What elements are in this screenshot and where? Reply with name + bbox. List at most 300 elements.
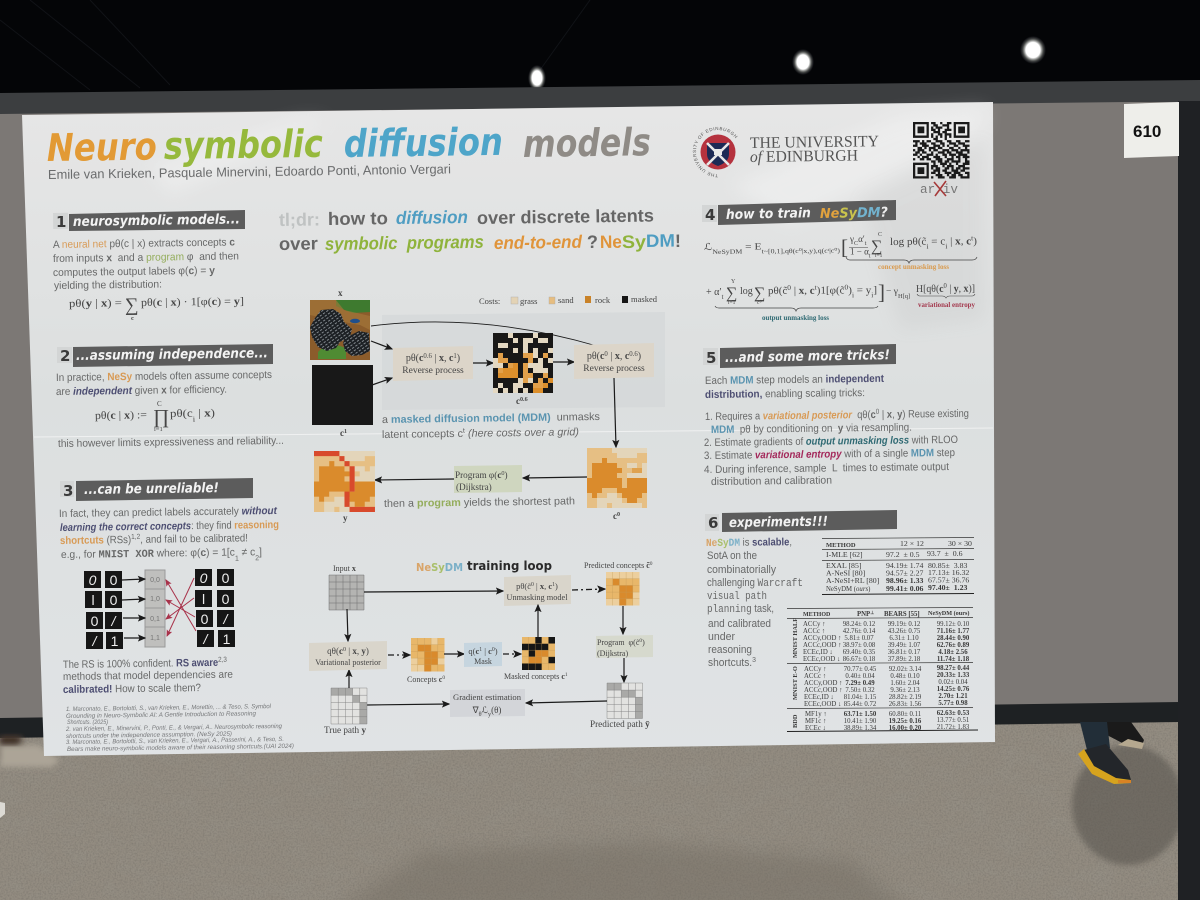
panel: poster sheet <box>22 102 995 756</box>
table: MNIST and BDD results: 42.76± 0.14 <box>843 628 876 635</box>
heading: tl;dr statement <box>279 206 681 254</box>
chart: NeSyDM training loop <box>309 559 653 735</box>
box: mask <box>464 642 502 667</box>
formula: NeSyDM loss first line: [ <box>841 235 848 259</box>
table: MNIST and BDD results: 0.40± 0.04 <box>845 673 875 680</box>
formula: NeSyDM loss second line: ∑ <box>726 285 737 302</box>
label: concepts: Concepts c0 <box>407 675 445 684</box>
arrow: reverse to c0.6 <box>473 362 493 364</box>
text block: scaling tricks list: distribution and calibration <box>711 475 832 488</box>
box: program Dijkstra: Program φ(c0) <box>455 470 508 480</box>
chart: masked diffusion figure <box>310 288 665 523</box>
text block: section 3 body: e.g., for MNIST XOR where: φ(c) = 1[c1 ≠ c2] <box>61 546 262 564</box>
arrow: unmasking to predicted <box>572 589 605 590</box>
formula: independence factorisation: ∏ <box>153 406 169 428</box>
table: MNIST and BDD results: ACCy,OOD ↑ <box>804 680 842 687</box>
formula: independence factorisation: pθ(c i | x) <box>170 407 215 423</box>
table: MNIST and BDD results: 26.83± 1.56 <box>889 701 922 708</box>
text block: references: 1. Marconato, E., Bortolotti, S., van Krieken, E., Morettin, ... & Teso, S. Symbol <box>66 703 272 713</box>
table: MNIST and BDD results: 9.36± 2.13 <box>890 687 920 694</box>
formula: independence factorisation: C <box>157 400 162 408</box>
formula: NeSyDM loss first line: ℒNeSyDM = E t~[0,1],qθ(c⁰|x,y),q(cᵗ|c⁰) <box>704 241 840 255</box>
table: MNIST and BDD results: 37.89± 2.18 <box>888 656 921 663</box>
table: MNIST and BDD results: 63.71± 1.50 <box>844 711 877 718</box>
text block: experiments summary: challenging Warcraft <box>707 577 803 590</box>
table: MNIST and BDD results: 43.26± 0.75 <box>888 628 921 635</box>
panel: section 4 how to train <box>702 200 978 322</box>
heading: training loop: training loop <box>467 559 552 573</box>
text block: section 2 body: are independent given x for efficiency. <box>56 384 227 398</box>
heading: section 4: 4 <box>705 206 715 224</box>
text block: scaling tricks list: 3. Estimate variational entropy with of a single MDM step <box>704 447 955 462</box>
caption: masked diffusion model: a masked diffusion model (MDM) unmasks <box>382 411 600 426</box>
title: Neuro <box>47 124 157 170</box>
table: scaling results: METHOD <box>826 542 856 549</box>
label: true path: True path y <box>324 725 366 735</box>
box: program: Program φ(c̃0) <box>597 638 645 647</box>
text block: RS aware note: calibrated! How to scale them? <box>63 682 201 696</box>
formula: NeSyDM loss second line: log <box>740 286 753 297</box>
label: predicted path: Predicted path ȳ <box>590 719 650 729</box>
formula: independence factorisation: i=1 <box>154 426 163 433</box>
formula: NeSyDM loss second line: output unmasking loss <box>762 314 829 322</box>
table: MNIST and BDD results: 98.27± 0.44 <box>937 665 970 672</box>
table: scaling results: 97.40± 1.23 <box>928 583 967 592</box>
text block: section 5 intro <box>705 373 884 401</box>
box: second reverse process <box>574 343 654 379</box>
table: MNIST and BDD results: 62.63± 0.53 <box>937 710 970 717</box>
chart: MNIST XOR reasoning shortcut diagram: 0 <box>110 592 118 608</box>
heading: section 4: NeSyDM? <box>820 205 888 222</box>
label: x: x <box>338 288 343 298</box>
formula: output distribution: ∑ <box>125 295 139 316</box>
chart: MNIST XOR reasoning shortcut diagram <box>84 569 235 649</box>
text block: section 1 body: computes the output labels φ(c) = y <box>53 265 215 279</box>
title: diffusion <box>344 120 503 166</box>
legend: costs: masked <box>631 294 658 304</box>
icon: visitor legs and shoes right <box>1078 722 1144 784</box>
table: MNIST and BDD results: MNIST E-O <box>792 666 799 700</box>
chart: MNIST XOR reasoning shortcut diagram: 0,0 <box>150 577 160 584</box>
heading: section 2: 2 <box>60 347 70 365</box>
heading: section 6: 6 <box>708 514 718 532</box>
chart: MNIST XOR reasoning shortcut diagram: 0 <box>89 572 97 588</box>
table: MNIST and BDD results: MF1c ↑ <box>805 718 826 725</box>
text block: experiments summary: under <box>708 631 735 643</box>
table: MNIST and BDD results: 13.77± 0.51 <box>937 717 969 724</box>
formula: NeSyDM loss second line: ] <box>878 280 885 304</box>
table: MNIST and BDD results: BEARS [55] <box>884 611 920 618</box>
formula: NeSyDM loss first line: log pθ(c̃ i = ci | x, ct) <box>890 234 978 251</box>
background: right post <box>1178 101 1200 900</box>
box: program <box>596 635 653 658</box>
table: MNIST and BDD results: 16.00± 0.20 <box>889 725 922 732</box>
table: MNIST and BDD results: 85.44± 0.72 <box>844 701 877 708</box>
background: grey poster board <box>0 100 1180 719</box>
text block: scaling tricks list: 1. Requires a variational posterior qθ(c0 | x, y) Reuse existing <box>705 405 969 423</box>
text block: RS aware note <box>63 654 233 696</box>
formula: independence factorisation <box>95 400 215 433</box>
logo: University of Edinburgh <box>692 126 879 178</box>
heading: section 1: 1 <box>56 213 66 231</box>
table: MNIST and BDD results: 36.81± 0.17 <box>888 649 921 656</box>
arrow: x skip connection <box>371 322 597 346</box>
heading: section 2: ...assuming independence... <box>76 345 268 364</box>
chart: MNIST XOR reasoning shortcut diagram: 0 <box>201 611 209 627</box>
heading: section 5 <box>703 344 896 368</box>
table: scaling results: 67.57± 36.76 <box>928 576 969 584</box>
chart: MNIST XOR reasoning shortcut diagram: 1 <box>223 631 231 647</box>
table: scaling results <box>822 538 974 594</box>
heading: tl;dr statement: over discrete latents <box>477 206 654 228</box>
icon: arXiv logo: ar iv <box>920 182 958 197</box>
text block: section 1 body: A neural net pθ(c | x) extracts concepts c <box>53 236 235 251</box>
heading: tl;dr statement: tl;dr: <box>279 209 320 230</box>
heading: section 6: experiments!!! <box>729 514 828 531</box>
arrow: posterior to concepts <box>388 654 410 656</box>
box: first reverse process: pθ(c0.6 | x, c1) <box>406 352 460 364</box>
background: board bottom frame <box>0 702 1180 738</box>
text block: RS aware note: The RS is 100% confident. RS aware2,3 <box>63 654 227 671</box>
table: MNIST and BDD results: 38.89± 1.34 <box>844 725 877 732</box>
table: MNIST and BDD results: 62.76± 0.89 <box>937 642 970 649</box>
table: MNIST and BDD results: 98.24± 0.12 <box>843 621 876 628</box>
table: MNIST and BDD results: ECEc,ID ↓ <box>803 649 833 656</box>
background: dark hall ceiling <box>0 0 1200 110</box>
grid: predicted path <box>607 683 642 718</box>
box: first reverse process <box>393 346 473 381</box>
icon: visitor legs left <box>0 736 60 818</box>
booth number 610 <box>1124 102 1179 158</box>
table: scaling results: 94.19± 1.74 <box>886 561 924 570</box>
table: MNIST and BDD results: 60.80± 0.11 <box>889 711 921 718</box>
heading: section 3: ...can be unreliable! <box>84 480 219 498</box>
table: MNIST and BDD results: ACCc ↑ <box>804 673 826 680</box>
heading: tl;dr statement: over <box>279 233 318 254</box>
panel: section 1 neurosymbolic models <box>53 210 245 322</box>
title <box>47 120 651 170</box>
icon: ceiling lights <box>528 36 1046 91</box>
grid: true path <box>331 688 367 724</box>
formula: NeSyDM loss first line: γCα′t <box>849 234 867 247</box>
grid: input x <box>329 575 364 610</box>
chart: MNIST XOR reasoning shortcut diagram: 0 <box>222 570 230 586</box>
formula: output distribution: pθ(y | x) = <box>69 297 122 310</box>
text block: references: Shortcuts. (2025) <box>67 719 108 726</box>
label: predicted concepts: Predicted concepts c̃0 <box>584 561 653 570</box>
legend: costs: grass <box>520 296 537 306</box>
table: scaling results: 94.57± 2.27 <box>886 568 924 578</box>
text block: section 3 body: learning the correct concepts: they find reasoning <box>60 519 279 534</box>
chart: MNIST XOR reasoning shortcut diagram: 1,0 <box>150 596 160 603</box>
table: MNIST and BDD results: ECEc,ID ↓ <box>804 694 834 701</box>
text block: scaling tricks list: 4. During inference, sample L times to estimate output <box>704 461 949 476</box>
formula: output distribution <box>69 295 244 322</box>
arrow: x to reverse <box>371 341 392 349</box>
title: symbolic <box>164 122 324 168</box>
table: MNIST and BDD results: NeSyDM (ours) <box>928 610 969 617</box>
text block: RS aware note: methods that model dependencies are <box>63 669 233 683</box>
heading: tl;dr statement: DM <box>646 231 675 251</box>
background: carpet floor <box>0 715 1200 900</box>
table: MNIST and BDD results: PNP⊥ <box>857 610 875 618</box>
box: mask: Mask <box>474 657 492 666</box>
image: black mask c1 <box>312 365 373 425</box>
booth number 610: 610 <box>1133 122 1161 141</box>
text block: section 2 body: In practice, NeSy models often assume concepts <box>56 369 272 384</box>
text block: section 3 body: shortcuts (RSs)1,2, and fail to be calibrated! <box>60 530 248 547</box>
table: MNIST and BDD results: METHOD <box>803 612 831 618</box>
table: scaling results: A-NeSI+RL [80] <box>826 576 880 585</box>
box: program Dijkstra <box>454 465 522 493</box>
table: MNIST and BDD results: ACCy,OOD ↑ <box>803 635 841 642</box>
table: MNIST and BDD results: ECEc,OOD ↓ <box>804 701 841 708</box>
heading: training loop: NeSyDM <box>416 561 463 574</box>
formula: NeSyDM loss first line: ∑ <box>871 238 882 255</box>
caption: masked diffusion model: latent concepts ct (here costs over a grid) <box>382 424 579 441</box>
arrow: true path to posterior <box>348 670 350 688</box>
table: scaling results: NeSyDM (ours) <box>826 586 870 593</box>
heading: tl;dr statement: Ne <box>600 232 622 252</box>
box: program Dijkstra: (Dijkstra) <box>456 482 492 492</box>
arrow: input to unmasking <box>364 591 503 592</box>
chart: MNIST XOR reasoning shortcut diagram: 1 <box>111 633 119 649</box>
heading: section 5: ...and some more tricks! <box>725 347 890 366</box>
table: MNIST and BDD results: 69.40± 0.35 <box>843 649 876 656</box>
title: models <box>523 120 651 166</box>
box: program: (Dijkstra) <box>597 649 628 658</box>
label: c0.6: c0.6 <box>516 396 528 406</box>
grid: partially masked c0.6 <box>493 333 553 393</box>
chart: MNIST XOR reasoning shortcut diagram: 0 <box>91 613 99 629</box>
table: MNIST and BDD results: MF1y ↑ <box>805 711 827 718</box>
grid: predicted concepts <box>606 572 640 606</box>
text block: references <box>65 703 294 753</box>
box: unmasking model <box>504 575 571 606</box>
formula: output distribution: pθ(c | x) · 1[φ( c) = y] <box>141 296 244 309</box>
chart: MNIST XOR reasoning shortcut diagram: l <box>91 592 95 608</box>
table: MNIST and BDD results: ACCc ↑ <box>803 628 825 635</box>
heading: tl;dr statement: ? <box>587 232 598 252</box>
heading: tl;dr statement: how to <box>328 208 388 229</box>
table: MNIST and BDD results: BDD <box>792 714 799 728</box>
table: MNIST and BDD results: 21.72± 1.83 <box>937 724 970 731</box>
table: MNIST and BDD results: 0.02± 0.04 <box>938 679 968 686</box>
formula: NeSyDM loss second line: i=1 <box>728 300 736 306</box>
table: MNIST and BDD results: ACCy ↑ <box>804 666 826 673</box>
formula: NeSyDM loss first line: i=1 <box>875 253 883 259</box>
table: MNIST and BDD results <box>787 608 978 732</box>
box: second reverse process: Reverse process <box>583 364 645 374</box>
table: scaling results: 30 × 30 <box>948 539 972 548</box>
box: unmasking model: pθ(c̃0 | x, c1) <box>516 581 558 591</box>
heading: tl;dr statement: Sy <box>622 232 646 252</box>
text block: section 1 body <box>53 236 239 292</box>
table: MNIST and BDD results: 20.33± 1.33 <box>937 672 970 679</box>
table: scaling results: I-MLE [62] <box>826 550 863 559</box>
caption: program yields path: then a program yields the shortest path <box>384 495 575 510</box>
table: MNIST and BDD results: 99.12± 0.10 <box>937 621 970 628</box>
box: mask: q(c1 | c0) <box>468 646 498 656</box>
table: MNIST and BDD results: 19.25± 0.16 <box>889 718 922 725</box>
text block: section 5 intro: Each MDM step models an independent <box>705 373 884 387</box>
box: variational posterior <box>309 641 387 671</box>
box: gradient estimation <box>450 689 525 718</box>
table: MNIST and BDD results: 6.31± 1.10 <box>889 635 919 642</box>
panel: section 5 more tricks <box>703 344 969 488</box>
table: MNIST and BDD results: 86.67± 0.18 <box>843 656 876 663</box>
table: MNIST and BDD results: 71.16± 1.77 <box>937 628 970 635</box>
panel: section 6 experiments <box>705 510 978 732</box>
heading: section 3: 3 <box>63 482 73 500</box>
text block: section 5 intro: distribution, enabling scaling tricks: <box>705 387 865 401</box>
label: c0: c0 <box>613 511 620 521</box>
logo: University of Edinburgh: THE UNIVERSITY <box>750 133 879 152</box>
chart: MNIST XOR reasoning shortcut diagram: 0 <box>222 591 230 607</box>
chart: MNIST XOR reasoning shortcut diagram: 0,1 <box>150 616 160 623</box>
text block: experiments summary: NeSyDM is scalable, <box>706 536 792 550</box>
chart: MNIST XOR reasoning shortcut diagram: / <box>92 633 99 649</box>
text block: references: Bears make neuro-symbolic models aware of their reasoning shortcuts.(UAI 2024) <box>67 743 294 753</box>
arrow: masked to unmasking <box>537 605 539 637</box>
text block: section 3 body <box>59 505 279 564</box>
arrow: program to y <box>375 479 454 480</box>
formula: NeSyDM loss second line: c̃⁰ <box>757 299 762 306</box>
text block: experiments summary: shortcuts.3 <box>708 654 756 669</box>
text block: scaling tricks list <box>704 405 969 488</box>
table: scaling results: 98.96± 1.33 <box>886 576 924 585</box>
arrow: predicted path to gradient <box>526 701 607 703</box>
legend: costs <box>479 294 658 306</box>
table: MNIST and BDD results: 5.81± 0.07 <box>844 635 874 642</box>
formula: NeSyDM loss second line: ∑ <box>754 285 765 302</box>
text block: experiments summary: visual path <box>707 591 767 603</box>
image: input terrain map x <box>310 300 370 360</box>
formula: NeSyDM loss first line: 1 − αt <box>850 246 871 260</box>
legend: costs: sand <box>558 295 574 305</box>
table: MNIST and BDD results: 7.50± 0.32 <box>845 687 875 694</box>
arrow: program to predicted path <box>623 658 625 682</box>
text block: section 1 body: yielding the distribution: <box>54 278 162 292</box>
formula: NeSyDM loss first line: concept unmasking loss <box>878 263 949 271</box>
table: scaling results: 80.85± 3.83 <box>928 561 967 570</box>
table: MNIST and BDD results: 10.41± 1.90 <box>844 718 877 725</box>
formula: NeSyDM loss second line: H[qθ(c0 | y, x)] <box>916 282 975 295</box>
label: input x: Input x <box>333 564 356 573</box>
legend: costs: Costs: <box>479 296 500 306</box>
arrow: concepts to mask <box>444 653 464 655</box>
text block: experiments summary: SotA on the <box>707 550 757 562</box>
text block: limits note: this however limits expressiveness and reliability... <box>58 435 284 450</box>
table: MNIST and BDD results: 38.97± 0.08 <box>843 642 876 649</box>
panel: section 3 can be unreliable <box>59 478 294 753</box>
formula: NeSyDM loss second line: Y <box>731 279 736 285</box>
table: scaling results: A-NeSI [80] <box>826 568 866 578</box>
caption: masked diffusion model <box>382 411 600 441</box>
text block: references: 2. van Krieken, E., Minervini, P., Ponti, E., & Vergari, A.. Neurosymbolic reasoning <box>65 723 282 733</box>
arrow: true path to gradient <box>367 704 449 705</box>
heading: section 5: 5 <box>706 349 716 367</box>
text block: scaling tricks list: 2. Estimate gradients of output unmasking loss with RLOO <box>704 434 958 449</box>
heading: tl;dr statement: symbolic programs <box>325 232 484 254</box>
heading: tl;dr statement: diffusion <box>396 207 468 228</box>
table: MNIST and BDD results: 7.29± 0.49 <box>845 680 875 687</box>
table: scaling results: 17.13± 16.32 <box>928 568 969 577</box>
arrow: mask to masked <box>503 653 521 655</box>
table: MNIST and BDD results: 28.82± 2.19 <box>889 694 922 701</box>
table: scaling results: 99.41± 0.06 <box>886 584 924 593</box>
table: MNIST and BDD results: 11.74± 1.18 <box>937 656 970 663</box>
formula: NeSyDM loss second line: + α′t <box>706 287 724 300</box>
heading: section 1: neurosymbolic models... <box>73 211 240 230</box>
arrow: c1 to reverse <box>372 378 392 385</box>
box: unmasking model: Unmasking model <box>506 593 568 602</box>
table: scaling results: 93.7 ± 0.6 <box>927 549 963 558</box>
grid: concepts <box>411 638 444 672</box>
text block: scaling tricks list: MDM pθ by conditioning on y via resampling. <box>711 422 912 436</box>
table: MNIST and BDD results: ACCc,OOD ↑ <box>804 687 843 694</box>
table: MNIST and BDD results: ECEc,OOD ↓ <box>803 656 840 663</box>
text block: experiments summary: reasoning <box>708 644 752 656</box>
formula: NeSyDM loss second line: − γH[q] <box>886 287 910 300</box>
heading: tl;dr statement: end-to-end <box>494 232 583 253</box>
table: MNIST and BDD results: 92.02± 3.14 <box>889 666 922 673</box>
text block: section 3 body: In fact, they can predict labels accurately without <box>59 505 277 520</box>
formula: NeSyDM loss second line: variational entropy <box>918 301 975 309</box>
table: MNIST and BDD results: 81.04± 1.15 <box>844 694 877 701</box>
authors: Emile van Krieken, Pasquale Minervini, Edoardo Ponti, Antonio Vergari <box>48 161 451 182</box>
table: MNIST and BDD results: 1.60± 2.04 <box>890 680 920 687</box>
label: y: y <box>343 513 348 523</box>
chart: MNIST XOR reasoning shortcut diagram: 0 <box>110 572 118 588</box>
text block: experiments summary: planning task, <box>707 603 774 616</box>
formula: independence factorisation: pθ(c | x) := <box>95 409 147 422</box>
table: MNIST and BDD results: ACCy ↑ <box>803 621 825 628</box>
text block: section 2 body <box>56 369 272 398</box>
panel: section 2 assuming independence <box>56 344 284 450</box>
text block: experiments summary: and calibrated <box>708 618 771 630</box>
text block: references: 3. Marconato, E., Bortolotti, S., van Krieken, E., Vergari, A., Passerini, A., & Teso, S. <box>66 736 284 746</box>
table: MNIST and BDD results: 39.49± 1.07 <box>888 642 921 649</box>
grid: masked concepts <box>522 637 555 670</box>
logo: University of Edinburgh: of EDINBURGH <box>750 147 858 166</box>
box: variational posterior: qθ(c0 | x, y) <box>327 646 369 656</box>
formula: output distribution: c <box>131 315 134 322</box>
table: MNIST and BDD results: MNIST HALF <box>792 618 799 658</box>
arrow: predicted to program <box>622 606 624 634</box>
legend: costs: rock <box>595 295 611 305</box>
table: MNIST and BDD results: ECEc ↓ <box>805 725 826 732</box>
chart: MNIST XOR reasoning shortcut diagram: / <box>203 631 210 647</box>
logo: University of Edinburgh: THE UNIVERSITY OF EDINBURGH <box>692 126 738 178</box>
formula: NeSyDM loss first line <box>704 232 978 271</box>
formula: NeSyDM loss second line: pθ(c̃0 | x, ct)1[φ(c̃0)i = yi] <box>768 283 877 300</box>
heading: section 4 <box>702 200 896 225</box>
box: gradient estimation: Gradient estimation <box>453 692 522 702</box>
chart: MNIST XOR reasoning shortcut diagram: 0 <box>200 570 208 586</box>
table: MNIST and BDD results: ACCc,OOD ↑ <box>803 642 842 649</box>
table: MNIST and BDD results: 4.18± 2.56 <box>938 649 968 656</box>
table: scaling results: 12 × 12 <box>900 539 924 548</box>
background: board top frame <box>0 80 1200 114</box>
heading: section 4: how to train <box>726 205 811 223</box>
arrow: input to posterior <box>347 609 348 641</box>
text block: references: Grounding in Neuro-Symbolic AI: A Gentle Introduction to Reasoning <box>66 710 257 720</box>
table: MNIST and BDD results: 5.77± 0.98 <box>938 700 968 707</box>
heading: section 3 <box>60 478 253 501</box>
chart: MNIST XOR reasoning shortcut diagram: / <box>223 611 230 627</box>
table: MNIST and BDD results: 0.48± 0.10 <box>890 673 920 680</box>
